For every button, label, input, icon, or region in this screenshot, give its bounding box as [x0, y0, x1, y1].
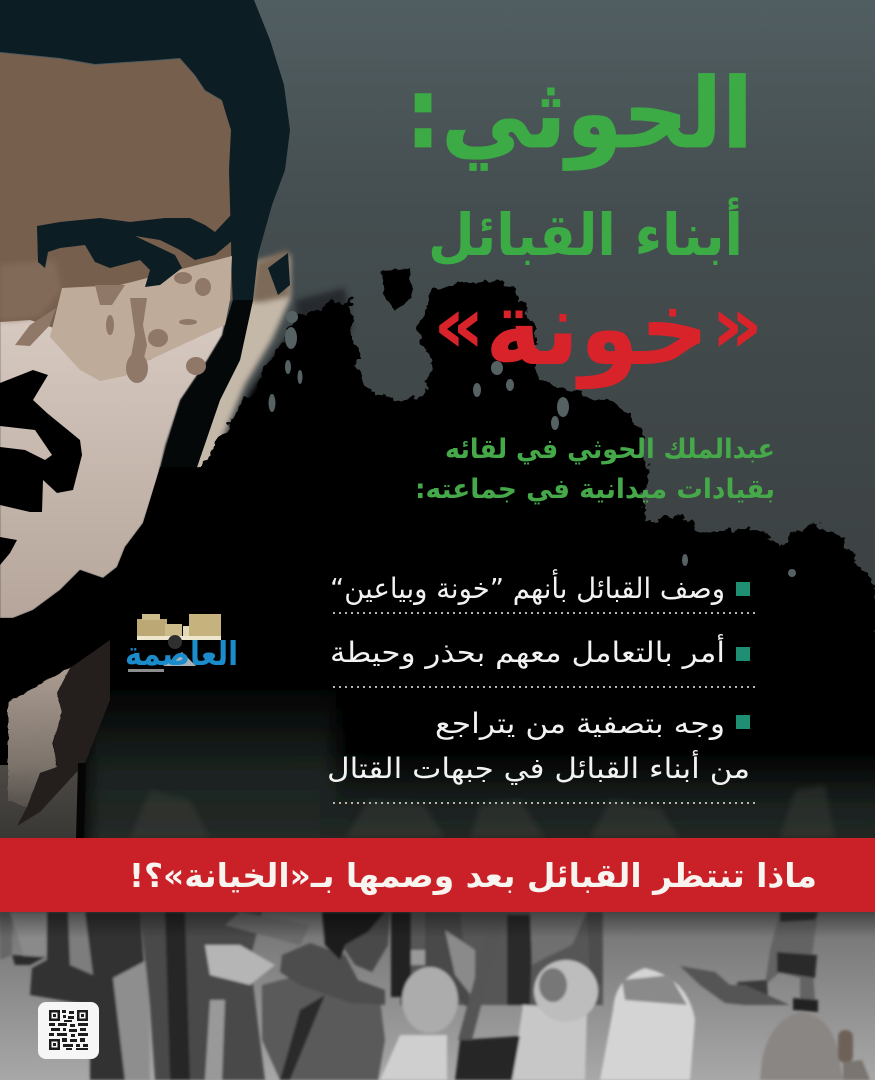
- portrait: mouth: [0, 537, 17, 565]
- standing man: [765, 912, 818, 1000]
- banner text: ماذا تنتظر القبائل بعد وصمها بـ«الخيانة»؟!: [129, 856, 817, 896]
- bullet 1: وصف القبائل بأنهم ”خونة وبياعين“: [330, 568, 725, 605]
- subtitle: green text: بقيادات ميدانية في جماعته:: [415, 474, 775, 505]
- portrait: right ear mark: [268, 253, 290, 295]
- man: scarf and arm: [280, 943, 385, 1005]
- standing man shadow: [680, 966, 790, 1005]
- dark crowd columns: [30, 912, 145, 1080]
- man 4: turban: [600, 968, 695, 1080]
- bullet 3: وجه بتصفية من يتراجع: [435, 707, 725, 740]
- subtitle: green text: [415, 434, 775, 505]
- rifle: [455, 1036, 520, 1080]
- bottom-right head: [760, 1012, 843, 1080]
- portrait: pale lower face: [0, 300, 228, 618]
- portrait: stains: [15, 272, 211, 383]
- bullet 3: من أبناء القبائل في جبهات القتال: [327, 749, 750, 785]
- bullet 3: [327, 707, 750, 785]
- logo: Al-Asimah: [125, 614, 238, 673]
- title: line 3 red: »: [711, 281, 763, 371]
- red banner: [0, 838, 875, 912]
- portrait: [0, 0, 290, 618]
- portrait: brown forehead: [0, 53, 232, 360]
- title: line 2: أبناء القبائل: [428, 197, 743, 269]
- far crowd cloth: [400, 912, 603, 1005]
- man 3: turban: [512, 1005, 587, 1080]
- logo name: العاصمة: [125, 634, 238, 673]
- black neck and chest: [0, 467, 330, 840]
- lower shoulder grey: [0, 765, 80, 838]
- bottom photo: tribesmen: [0, 912, 875, 1080]
- subtitle: green text: عبدالملك الحوثي في لقائه: [445, 434, 775, 465]
- title: line 3 red: خونة: [485, 267, 709, 389]
- dark vertical crease: [76, 763, 86, 838]
- dark pole: [391, 912, 411, 997]
- portrait: eyebrow: [37, 215, 233, 287]
- QR code: [38, 1002, 99, 1059]
- splatter: small black patch: [382, 268, 412, 310]
- black splatter silhouette: [180, 268, 875, 845]
- lower neck: dark shoulder strip: [17, 640, 110, 826]
- dark green glow: [86, 680, 875, 870]
- portrait: black lower neck: [160, 300, 253, 467]
- title: line 1: الحوثي:: [405, 57, 753, 171]
- bullet list: [327, 568, 756, 803]
- man: body: [262, 975, 385, 1080]
- faded figures behind text: [130, 785, 835, 838]
- splatter: dark leafy patch: [296, 288, 352, 352]
- logo buildings: [137, 614, 221, 640]
- title: line 3 red: «: [433, 281, 485, 371]
- portrait: mid-tone face area: [50, 256, 232, 381]
- portrait: halo strip beside neck: [190, 255, 290, 495]
- portrait: hair: [0, 0, 290, 467]
- man 2: turban: [380, 1035, 447, 1080]
- lower neck panel: [8, 668, 70, 807]
- splatter: grey drips: [268, 311, 796, 577]
- bullet 2: أمر بالتعامل معهم بحذر وحيطة: [330, 633, 725, 669]
- man: head: [322, 912, 390, 972]
- portrait: nose: [0, 370, 82, 512]
